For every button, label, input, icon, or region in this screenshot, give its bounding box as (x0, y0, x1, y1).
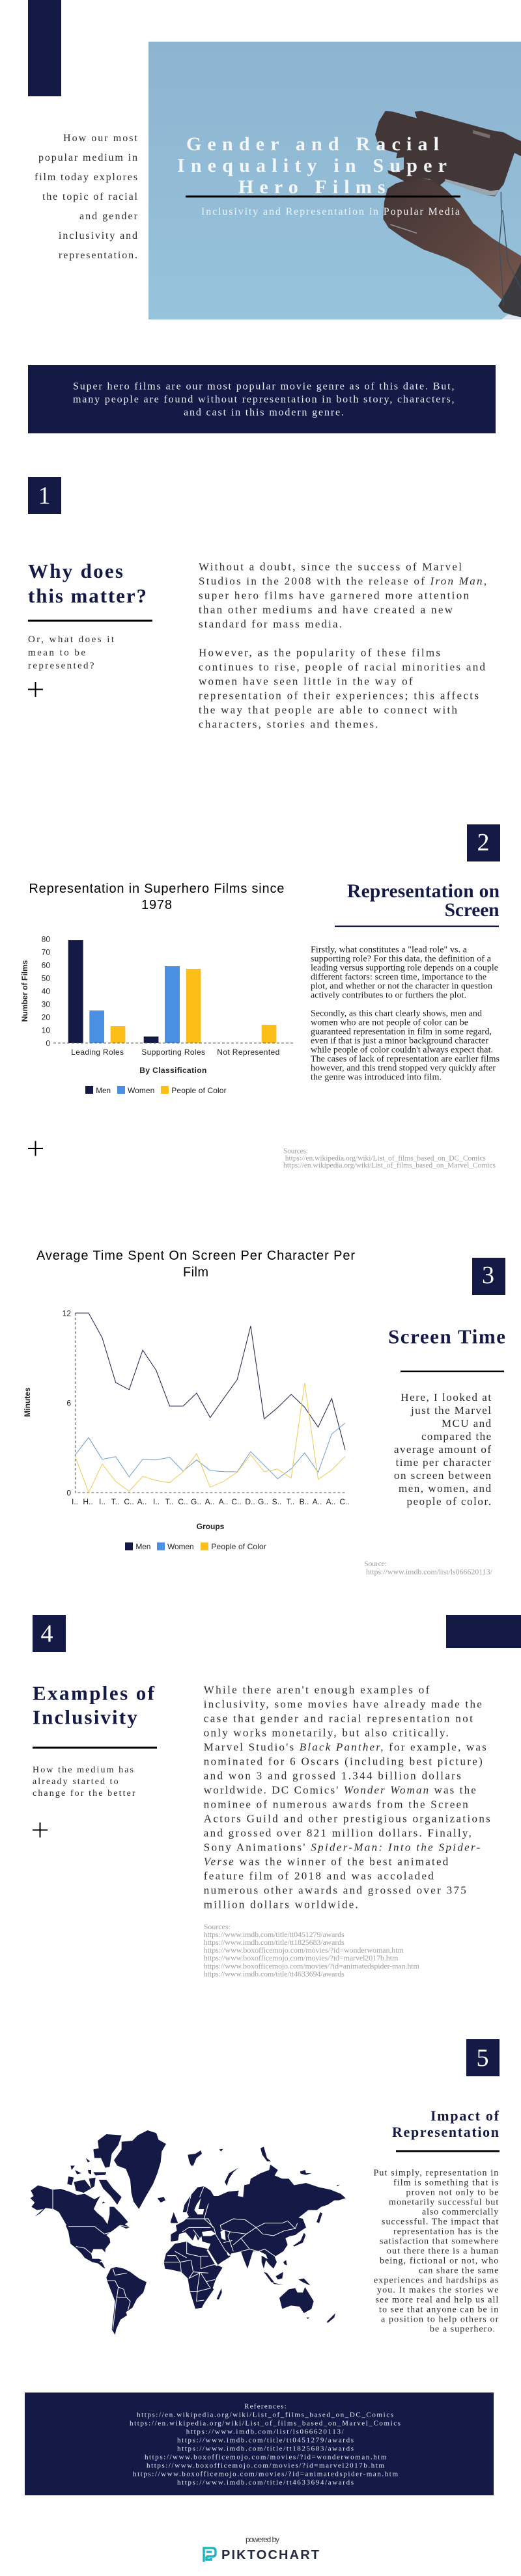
references banner: https://www.imdb.com/title/tt0451279/awards (177, 2436, 354, 2444)
references banner: https://www.imdb.com/list/ls066620113/ (186, 2428, 345, 2436)
source (364, 1559, 493, 1577)
number badge 1 (28, 477, 61, 514)
subheading: already started to (33, 1777, 119, 1787)
heading rule (335, 925, 499, 927)
source: https://www.imdb.com/list/ls066620113/ (366, 1567, 493, 1577)
panel: section 1 why does this matter (28, 477, 486, 731)
body text: to see that anyone can be in (379, 2305, 498, 2314)
icon: plus (28, 682, 43, 697)
x axis labels: G.. (258, 1497, 268, 1506)
x axis labels: G.. (191, 1497, 201, 1506)
sources: https://www.boxofficemojo.com/movies/?id=marvel2017b.htm (204, 1953, 399, 1962)
number badge 5 (466, 2039, 500, 2076)
body text: continues to rise, people of racial minorities and (199, 661, 486, 673)
body text: satisfaction that somewhere (380, 2236, 498, 2246)
x axis labels: T.. (165, 1497, 173, 1506)
footer: powered by Piktochart: PIKTOCHART (221, 2548, 319, 2562)
x axis labels: Supporting Roles (141, 1048, 205, 1057)
heading (28, 560, 147, 607)
heading (33, 1681, 155, 1728)
x axis labels: T.. (111, 1497, 119, 1506)
y axis labels: 40 (42, 986, 50, 996)
x axis labels: I.. (99, 1497, 106, 1506)
heading: Screen Time (388, 1325, 505, 1348)
legend: Men (135, 1542, 150, 1551)
body text: representation has is the (393, 2227, 498, 2236)
number badge 2 (467, 824, 500, 861)
summary banner (28, 365, 496, 433)
body text (311, 945, 500, 1083)
body text: Studios in the 2008 with the release of Iron Man, (199, 575, 486, 587)
hero photo: hand holding a camera against the sky (148, 42, 521, 319)
icon: plus (33, 1823, 48, 1837)
body text: supporting role? For this data, the definition of a (311, 955, 492, 964)
intro text: How our most (63, 133, 138, 144)
body text: you. It makes the stories we (377, 2285, 498, 2295)
intro text: film today explores (35, 172, 137, 183)
body text: the way that people are able to connect with (199, 704, 457, 716)
title: Inequality in Super (177, 155, 447, 176)
title (177, 133, 447, 198)
y axis labels: 70 (42, 947, 50, 956)
x axis labels: A.. (205, 1497, 214, 1506)
body text: women have seen little in the way of (199, 675, 413, 688)
sources (204, 1922, 419, 1978)
body text: feature film of 2018 and was accoladed (204, 1869, 434, 1882)
subheading: change for the better (33, 1789, 135, 1798)
body text: standard for mass media. (199, 617, 342, 630)
title: Gender and Racial (186, 133, 439, 155)
heading: Screen (445, 900, 500, 921)
decorative top navy block (28, 0, 61, 96)
body text: while people of color couldn't always expect that. (311, 1046, 493, 1055)
sources: https://www.boxofficemojo.com/movies/?id=wonderwoman.htm (204, 1946, 404, 1955)
body text: compared the (421, 1430, 491, 1443)
panel: section 3 screen time (23, 1249, 505, 1577)
title: Hero Films (238, 176, 386, 198)
body text: see more real and help us all (375, 2295, 498, 2305)
body text: actively contributes to or furthers the plot. (311, 991, 466, 1001)
heading: Representation on (347, 881, 500, 902)
sources: https://www.imdb.com/title/tt4633694/awards (204, 1969, 345, 1978)
body text: proven not only to be (406, 2188, 498, 2197)
subheading: mean to be (28, 648, 85, 658)
panel: section 4 examples of inclusivity (33, 1615, 521, 1978)
bar chart: representation in superhero films (20, 882, 293, 1095)
chart title (29, 882, 284, 912)
title rule (186, 195, 460, 198)
y axis labels: 0 (66, 1489, 71, 1498)
references banner: References: (244, 2402, 287, 2410)
x axis labels: C.. (231, 1497, 242, 1506)
body text: Sony Animations' Spider-Man: Into the Spider- (204, 1841, 481, 1853)
legend (125, 1542, 266, 1551)
references banner: https://www.imdb.com/title/tt1825683/awards (177, 2445, 354, 2453)
x axis labels: S.. (272, 1497, 281, 1506)
x axis labels: I.. (72, 1497, 78, 1506)
number badge 5: 5 (477, 2044, 488, 2072)
body text: out there there is a human (387, 2246, 498, 2256)
sources: https://www.boxofficemojo.com/movies/?id=animatedspider-man.htm (204, 1961, 419, 1970)
series: people of color (75, 1383, 345, 1493)
legend (85, 1086, 227, 1095)
x axis labels: C.. (339, 1497, 350, 1506)
x axis labels: T.. (287, 1497, 294, 1506)
body text: plot, and whether or not the character in question (311, 982, 492, 992)
panel: section 2 representation on screen (20, 824, 500, 1170)
bars (68, 940, 276, 1043)
heading rule (401, 1370, 504, 1372)
sources (283, 1148, 496, 1170)
world map (31, 2130, 346, 2335)
intro text: and gender (79, 211, 138, 222)
x axis labels: Leading Roles (71, 1048, 124, 1057)
body text: time per character (396, 1456, 491, 1469)
body text: also commercially (422, 2207, 498, 2217)
heading rule (28, 619, 152, 622)
subheading (33, 1765, 135, 1798)
heading: Impact of (430, 2108, 500, 2124)
heading rule (33, 1746, 157, 1749)
body text: just the Marvel (410, 1404, 491, 1417)
body text: worldwide. DC Comics' Wonder Woman was the (204, 1783, 476, 1796)
body text: Firstly, what constitutes a "lead role" vs. a (311, 945, 468, 955)
references banner: https://www.boxofficemojo.com/movies/?id=animatedspider-man.htm (133, 2470, 398, 2478)
body text: characters, stories and themes. (199, 718, 378, 731)
x axis labels (72, 1497, 350, 1506)
body text: nominee of numerous awards from the Screen (204, 1798, 468, 1810)
body text: leading versus supporting role depends on a couple (311, 964, 498, 973)
line chart: average time on screen (23, 1249, 355, 1551)
summary banner: Super hero films are our most popular movie genre as of this date. But, (73, 381, 454, 392)
body text: being, fictional or not, who (380, 2256, 498, 2266)
body text: the genre was introduced into film. (311, 1073, 442, 1083)
y axis labels (63, 1309, 71, 1498)
chart title: 1978 (141, 898, 172, 912)
icon: plus (28, 1141, 43, 1156)
body text (374, 2168, 499, 2334)
body text: While there aren't enough examples of (204, 1683, 430, 1696)
y axis labels (42, 934, 50, 1048)
intro text: inclusivity and (59, 230, 137, 241)
body text: Put simply, representation in (374, 2168, 498, 2178)
number badge 2: 2 (477, 829, 490, 856)
references banner: https://www.boxofficemojo.com/movies/?id=wonderwoman.htm (145, 2453, 387, 2461)
y axis title: Minutes (23, 1387, 32, 1417)
decorative navy block right (446, 1615, 521, 1648)
intro text: the topic of racial (42, 191, 138, 202)
number badge 4 (33, 1615, 66, 1652)
body text: Secondly, as this chart clearly shows, men and (311, 1009, 482, 1019)
sources: Sources: (283, 1148, 308, 1156)
footer: powered by Piktochart: powered by (246, 2535, 279, 2544)
heading: Examples of (33, 1681, 155, 1704)
heading: Inclusivity (33, 1705, 137, 1728)
sources: https://en.wikipedia.org/wiki/List_of_films_based_on_DC_Comics (285, 1154, 486, 1162)
body text: monetarily successful but (389, 2197, 498, 2207)
body text: women who are not people of color can be (311, 1018, 468, 1028)
y axis title: Number of Films (20, 960, 29, 1022)
panel: section 5 impact of representation (31, 2039, 500, 2335)
y axis labels: 80 (42, 934, 50, 943)
summary banner: and cast in this modern genre. (184, 407, 344, 418)
body text: film is something that is (393, 2178, 498, 2188)
body text: The cases of lack of representation are earlier films (311, 1055, 500, 1064)
footer: powered by Piktochart (204, 2535, 319, 2562)
body text: and won 3 and grossed 1.344 billion dollars (204, 1769, 461, 1782)
body text: and grossed over 821 million dollars. Finally, (204, 1826, 472, 1839)
body text: only works monetarily, but also critically. (204, 1726, 449, 1739)
body text: super hero films have garnered more attention (199, 589, 469, 601)
chart title: Film (183, 1265, 208, 1279)
references banner: https://www.boxofficemojo.com/movies/?id=marvel2017b.htm (147, 2462, 384, 2470)
y axis labels: 30 (42, 999, 50, 1009)
body text: guaranteed representation in film in some regard, (311, 1027, 492, 1037)
body text: Here, I looked at (401, 1391, 491, 1403)
body text: representation of their experiences; this affects (199, 690, 479, 702)
legend: Women (128, 1086, 154, 1095)
number badge 1: 1 (38, 482, 51, 509)
body text: successful. The impact that (382, 2217, 498, 2227)
body text: experiences and hardships as (374, 2275, 498, 2285)
intro text (35, 133, 138, 261)
intro text: representation. (59, 250, 137, 261)
body text: Actors Guild and other prestigious organizations (204, 1812, 490, 1824)
x axis labels: D.. (245, 1497, 255, 1506)
sources: Sources: (204, 1922, 231, 1931)
body text: numerous other awards and grossed over 375 (204, 1884, 466, 1896)
body text: nominated for 6 Oscars (including best picture) (204, 1755, 483, 1767)
number badge 3 (472, 1258, 505, 1295)
y axis labels: 20 (42, 1012, 50, 1022)
x axis labels: I.. (153, 1497, 160, 1506)
y axis labels: 60 (42, 960, 50, 969)
references banner (25, 2393, 494, 2495)
subheading: Or, what does it (28, 634, 115, 645)
body text: inclusivity, some movies have already made the (204, 1698, 482, 1710)
x axis labels: C.. (124, 1497, 134, 1506)
body text: million dollars worldwide. (204, 1898, 358, 1910)
sources: https://en.wikipedia.org/wiki/List_of_films_based_on_Marvel_Comics (283, 1162, 496, 1170)
body text: case that gender and racial representation not (204, 1712, 473, 1724)
body text: average amount of (394, 1443, 491, 1456)
x axis labels: H.. (83, 1497, 93, 1506)
heading: this matter? (28, 584, 147, 607)
body text: Verse was the winner of the best animated (204, 1855, 449, 1867)
body text (199, 560, 486, 731)
summary banner: many people are found without representation in both story, characters, (73, 394, 454, 405)
y axis labels: 6 (66, 1399, 71, 1408)
series: women (75, 1423, 345, 1479)
x axis labels: A.. (313, 1497, 322, 1506)
x axis labels: Not Represented (217, 1048, 279, 1057)
x axis labels: A.. (326, 1497, 335, 1506)
sources: https://www.imdb.com/title/tt0451279/awards (204, 1930, 345, 1939)
y axis labels: 10 (42, 1025, 50, 1035)
references banner: https://en.wikipedia.org/wiki/List_of_films_based_on_Marvel_Comics (130, 2419, 401, 2427)
x axis labels: A.. (219, 1497, 228, 1506)
x axis labels: A.. (137, 1497, 147, 1506)
body text (204, 1683, 490, 1910)
body text: however, and this trend stopped very quickly after (311, 1064, 496, 1074)
body text: be a superhero. (430, 2324, 495, 2334)
body text: MCU and (442, 1417, 491, 1430)
x axis title: By Classification (139, 1066, 206, 1075)
x axis labels (71, 1048, 279, 1057)
body text: However, as the popularity of these films (199, 647, 440, 659)
body text: even if that is just a minor background character (311, 1037, 488, 1046)
subtitle: Inclusivity and Representation in Popular Media (201, 206, 460, 217)
sources: https://www.imdb.com/title/tt1825683/awards (204, 1938, 345, 1947)
subheading: represented? (28, 661, 94, 671)
y axis labels: 12 (63, 1309, 71, 1318)
heading: Representation (392, 2124, 499, 2140)
heading (392, 2108, 500, 2140)
body text (394, 1391, 491, 1508)
heading rule (396, 2150, 500, 2152)
legend: Men (96, 1086, 111, 1095)
x axis title: Groups (197, 1522, 225, 1531)
body text: different factors: screen time, importance to the (311, 973, 486, 983)
legend: Women (167, 1542, 194, 1551)
number badge 3: 3 (482, 1262, 494, 1289)
intro text: popular medium in (38, 152, 137, 163)
subheading: How the medium has (33, 1765, 134, 1775)
body text: Marvel Studio's Black Panther, for example, was (204, 1741, 486, 1753)
icon: Piktochart logo mark (204, 2548, 216, 2562)
body text: men, women, and (399, 1482, 491, 1495)
x axis labels: C.. (178, 1497, 188, 1506)
series: men (75, 1313, 345, 1450)
number badge 4: 4 (40, 1620, 53, 1647)
body text: a position to help others or (381, 2314, 499, 2324)
chart title: Representation in Superhero Films since (29, 882, 284, 896)
references banner: https://www.imdb.com/title/tt4633694/awards (177, 2479, 354, 2487)
body text: people of color. (406, 1495, 491, 1508)
body text: than other mediums and have created a new (199, 603, 453, 616)
y axis labels: 0 (46, 1038, 50, 1048)
references banner: https://en.wikipedia.org/wiki/List_of_films_based_on_DC_Comics (137, 2411, 393, 2419)
y axis labels: 50 (42, 973, 50, 983)
chart title: Average Time Spent On Screen Per Character Per (36, 1249, 355, 1263)
heading (347, 881, 500, 921)
chart title (36, 1249, 355, 1279)
body text: can share the same (419, 2266, 498, 2275)
heading: Why does (28, 560, 123, 582)
x axis labels: B.. (300, 1497, 309, 1506)
source: Source: (364, 1559, 387, 1568)
body text: Without a doubt, since the success of Marvel (199, 560, 462, 573)
body text: on screen between (394, 1469, 491, 1482)
legend: People of Color (171, 1086, 227, 1095)
legend: People of Color (211, 1542, 266, 1551)
subheading (28, 634, 115, 671)
